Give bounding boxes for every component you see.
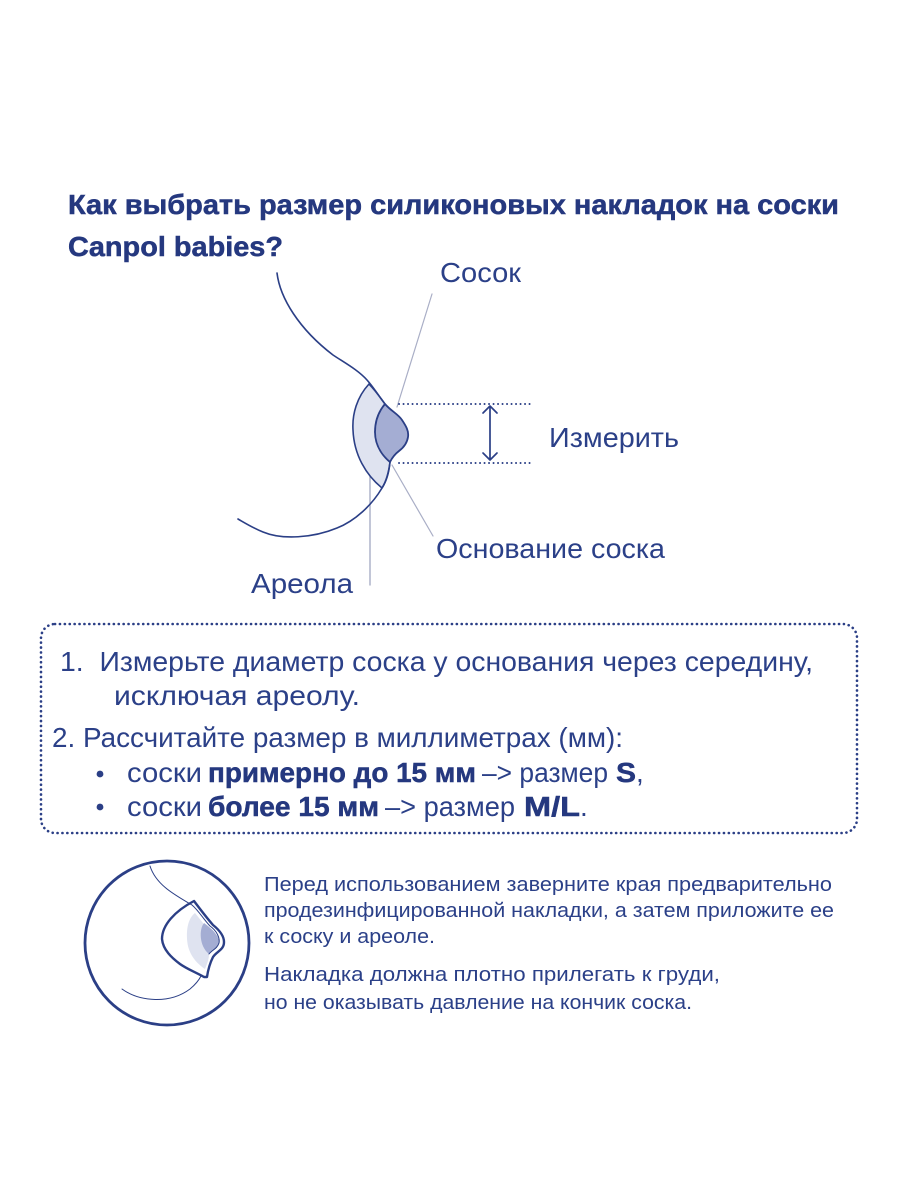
instructions panel: [41, 624, 857, 833]
label: measure: Измерить: [549, 422, 679, 453]
bullet: up to 15 mm: [97, 757, 644, 788]
bullet: up to 15 mm: соски: [127, 757, 202, 788]
label: nipple: Сосок: [440, 257, 522, 288]
usage text: но не оказывать давление на кончик соска.: [264, 991, 692, 1014]
step 2: 2. Рассчитайте размер в миллиметрах (мм):: [52, 722, 623, 753]
step 1: 1. Измерьте диаметр соска у основания через середину,: [60, 646, 813, 677]
bullet: up to 15 mm: ,: [636, 757, 644, 788]
shield outline: [162, 901, 224, 977]
bullet: over 15 mm: .: [580, 791, 588, 822]
anatomy diagram: [238, 273, 534, 585]
bullet: over 15 mm: –> размер: [385, 791, 515, 822]
bullet: over 15 mm: [97, 791, 588, 822]
label: nipple base: Основание соска: [436, 533, 665, 564]
areola in shield: [187, 913, 209, 969]
bullet: up to 15 mm: S: [616, 757, 636, 788]
bullet: up to 15 mm: примерно до 15 мм: [208, 757, 476, 788]
leader line: nipple: [397, 294, 432, 407]
bullet: up to 15 mm: –> размер: [482, 757, 608, 788]
usage text: Перед использованием заверните края предварительно: [264, 873, 832, 896]
title: Canpol babies?: [68, 231, 283, 262]
measure lines: [399, 404, 534, 463]
leader line: nipple base: [392, 465, 433, 536]
icon: nipple shield on breast: [85, 861, 249, 1025]
areola: [353, 384, 390, 488]
title: Как выбрать размер силиконовых накладок на соски: [68, 189, 839, 220]
bullet: over 15 mm: M/L: [524, 791, 580, 822]
bullet: over 15 mm: соски: [127, 791, 202, 822]
bullet: over 15 mm: более 15 мм: [208, 791, 379, 822]
usage text: продезинфицированной накладки, а затем приложите ее: [264, 899, 834, 922]
instructions panel: исключая ареолу.: [114, 680, 360, 711]
leader line: areola: [369, 477, 371, 585]
breast lines: [150, 866, 219, 954]
nipple in shield: [201, 923, 219, 954]
usage text: Накладка должна плотно прилегать к груди,: [264, 963, 720, 986]
measure arrow: [483, 406, 497, 460]
label: areola: Ареола: [251, 568, 353, 599]
nipple: [375, 404, 408, 462]
title: [68, 189, 839, 262]
usage text: к соску и ареоле.: [264, 925, 435, 948]
usage text: [264, 873, 834, 1014]
breast outline: [238, 273, 390, 537]
